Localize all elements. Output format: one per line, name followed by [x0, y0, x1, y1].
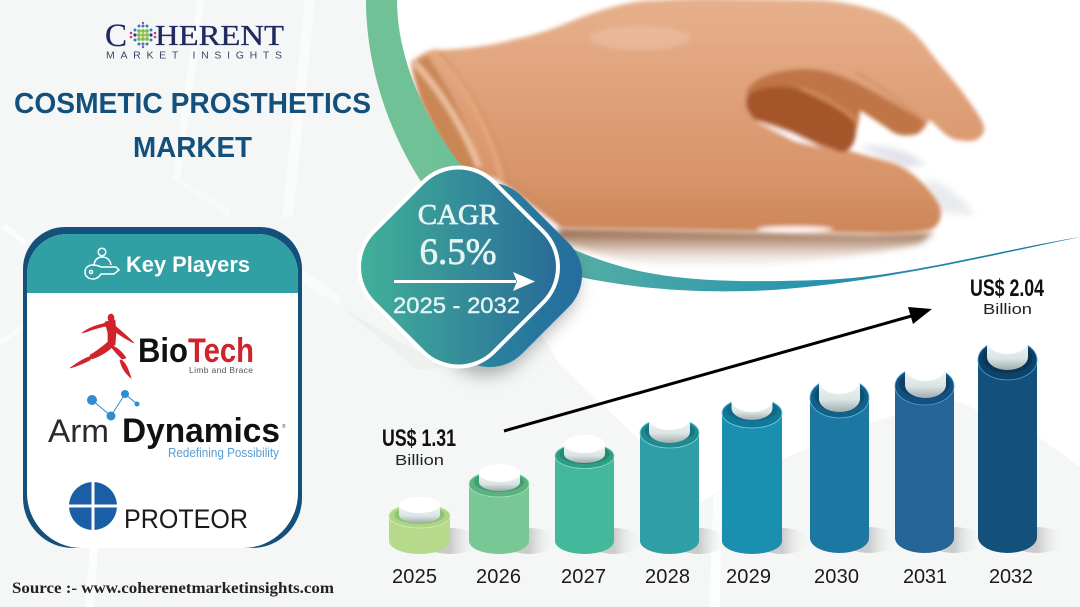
logo: Arm Dynamics: ® — [282, 423, 286, 430]
logo: Coherent Market Insights: MARKET INSIGHTS — [106, 50, 282, 62]
year labels: 2025 — [392, 566, 437, 588]
logo: Coherent Market Insights: HERENT — [155, 21, 284, 52]
bar 2026 — [469, 464, 555, 554]
CAGR badge: 6.5% — [419, 232, 497, 273]
arrow: CAGR period — [394, 272, 535, 291]
title: COSMETIC PROSTHETICS — [14, 88, 371, 120]
bar 2032 — [978, 328, 1063, 553]
year labels: 2029 — [726, 566, 771, 588]
wrist cuff — [411, 56, 480, 172]
running figure — [70, 314, 134, 378]
source: Source :- www.coherenetmarketinsights.com — [12, 580, 334, 597]
logo: BioTech: Limb and Brace — [189, 365, 253, 375]
year labels: 2027 — [561, 566, 606, 588]
panel header — [27, 234, 298, 293]
year labels: 2031 — [903, 566, 947, 588]
year labels: 2026 — [476, 566, 521, 588]
logo: Coherent Market Insights: C — [105, 18, 127, 54]
callout: 2025 value: Billion — [395, 452, 444, 469]
bar 2031 — [895, 355, 980, 553]
callout: 2032 value: Billion — [983, 301, 1032, 318]
logo: BioTech — [70, 314, 254, 378]
year labels: 2032 — [989, 566, 1033, 588]
photo: prosthetic hand — [411, 0, 984, 268]
logo: Arm Dynamics: Dynamics — [122, 412, 280, 450]
logo: Proteor — [67, 480, 248, 534]
logo dot mark — [130, 22, 156, 48]
logo: BioTech: Tech — [188, 332, 254, 370]
bar 2029 — [722, 388, 808, 554]
year labels: 2030 — [814, 566, 859, 588]
arrow: growth trend — [504, 307, 932, 431]
year labels — [392, 566, 1033, 588]
shaded fingers — [746, 69, 925, 150]
bar 2025 — [389, 497, 478, 554]
panel heading: Key Players — [126, 252, 250, 277]
bar 2027 — [555, 435, 640, 554]
panel: key players — [23, 227, 302, 548]
icon: key and person — [85, 248, 119, 279]
bar 2028 — [640, 408, 725, 554]
logo: Arm Dynamics: Arm — [48, 413, 109, 449]
logo: Arm Dynamics — [48, 390, 286, 460]
year labels: 2028 — [645, 566, 690, 588]
logo: Proteor: PROTEOR — [124, 504, 248, 534]
curved green to blue arc — [366, 0, 1080, 291]
bar chart: cylinders 2025 to 2032 — [389, 328, 1063, 588]
logo: Coherent Market Insights — [105, 18, 284, 62]
callout: 2025 value — [382, 425, 456, 469]
bar 2030 — [810, 368, 895, 553]
CAGR badge: CAGR — [418, 199, 499, 231]
callout: 2032 value — [970, 275, 1044, 318]
CAGR badge — [338, 147, 601, 387]
title — [14, 88, 371, 164]
callout: 2032 value: US$ 2.04 — [970, 275, 1044, 302]
logo: BioTech: Bio — [138, 332, 188, 370]
logo: Arm Dynamics: Redefining Possibility — [168, 445, 279, 460]
white image area — [397, 0, 1080, 281]
title: MARKET — [133, 132, 252, 164]
CAGR badge: 2025 - 2032 — [393, 293, 520, 318]
callout: 2025 value: US$ 1.31 — [382, 425, 456, 452]
